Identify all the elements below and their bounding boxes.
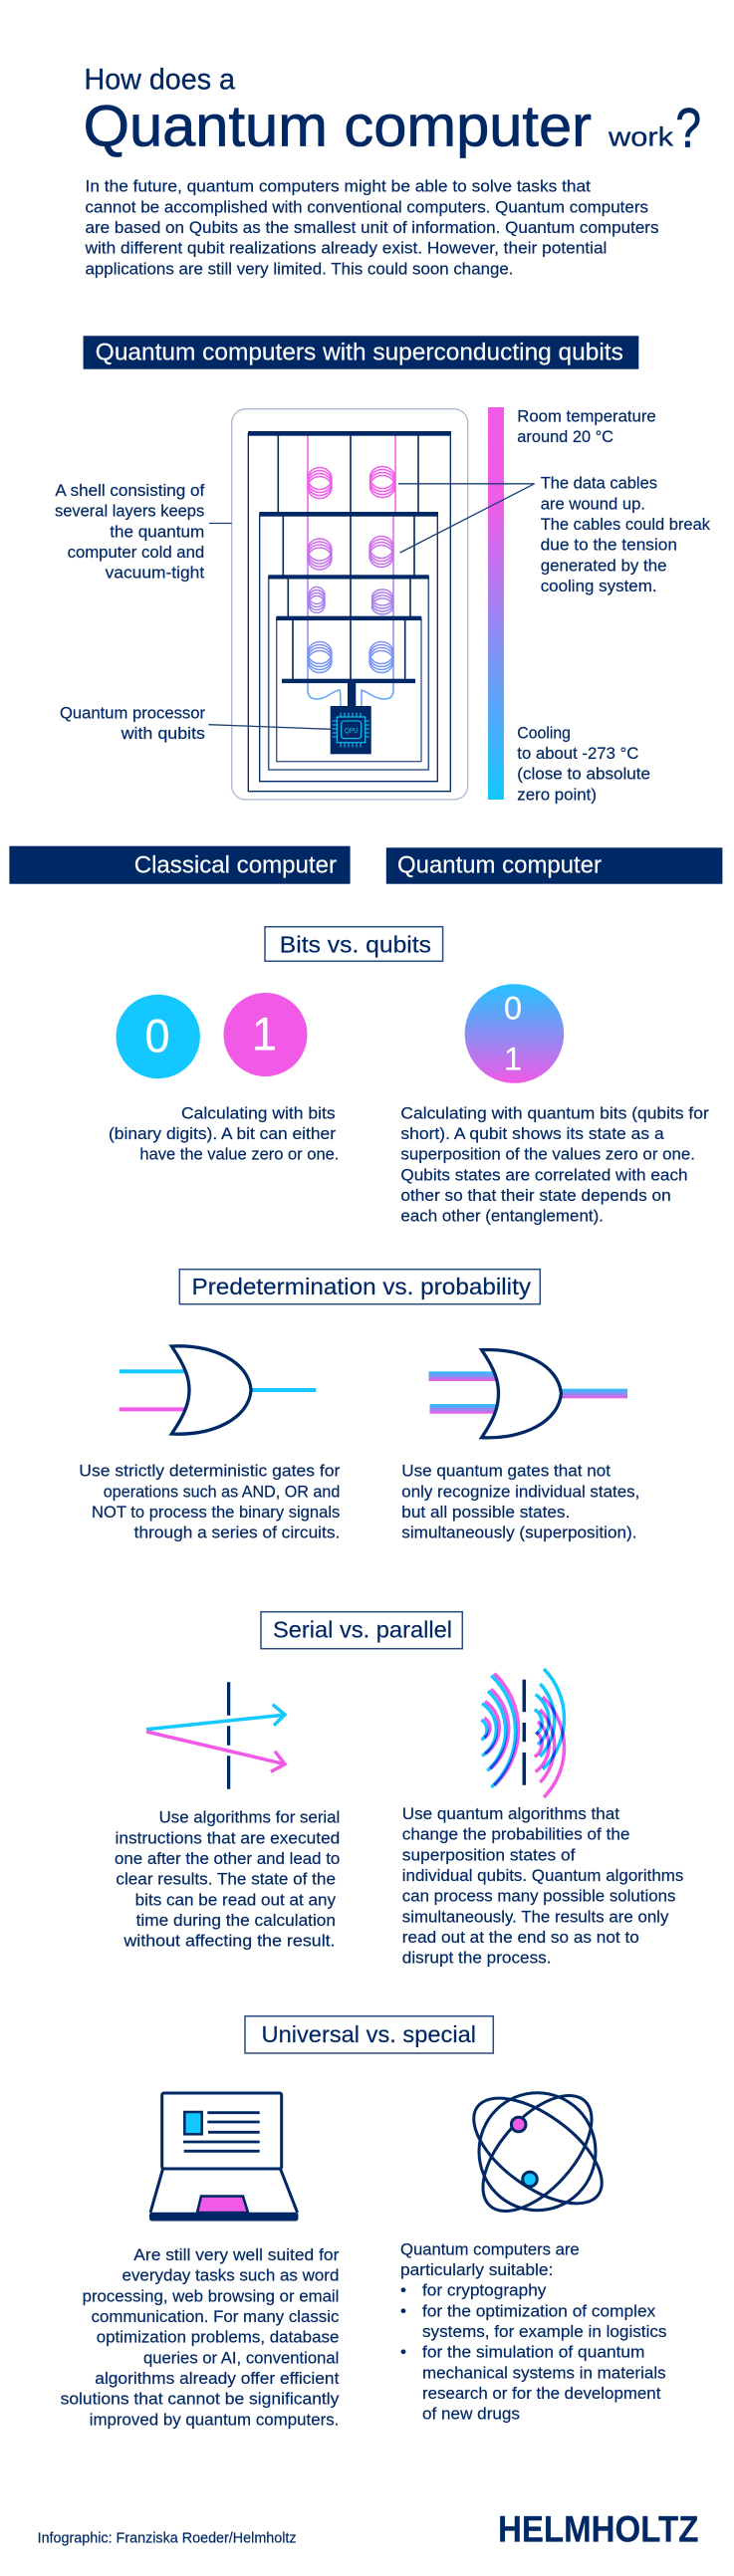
section heading: serial vs parallel: Serial vs. parallel: [273, 1616, 452, 1642]
icon: atom: [456, 2077, 619, 2229]
label: shell: computer cold and: [68, 543, 204, 562]
section heading: serial vs parallel: [261, 1612, 462, 1649]
label: shell: several layers keeps: [55, 502, 204, 521]
text: special: [400, 2239, 667, 2424]
text: special: particularly suitable:: [400, 2260, 553, 2279]
text: special: •: [400, 2301, 406, 2320]
section heading: universal vs special: [245, 2016, 493, 2053]
label: shell: vacuum-tight: [106, 564, 204, 583]
callout lines: [208, 484, 535, 729]
label: room temperature: Room temperature: [517, 406, 656, 425]
title: [84, 63, 701, 159]
text: qubits: other so that their state depends on: [400, 1186, 671, 1205]
QPU chip: [331, 706, 371, 754]
icon: qubit: 1: [504, 1042, 522, 1077]
text: quantum algorithms: change the probabilities of the: [402, 1825, 629, 1844]
text: universal: [61, 2245, 340, 2429]
label: data cables: are wound up.: [541, 494, 645, 513]
text: deterministic gates: operations such as AND, OR and: [104, 1482, 340, 1501]
text: quantum gates: [401, 1462, 639, 1542]
text: universal: Are still very well suited for: [133, 2245, 340, 2264]
icon: serial arrows through slits: [146, 1682, 285, 1789]
text: quantum algorithms: Use quantum algorithms that: [402, 1804, 619, 1823]
plates: [248, 431, 451, 707]
text: quantum gates: but all possible states.: [401, 1503, 570, 1522]
label: cooling: [517, 723, 650, 804]
icon: laptop: [149, 2093, 299, 2221]
text: serial algorithms: Use algorithms for serial: [159, 1808, 340, 1827]
title: How does a: [84, 63, 235, 96]
text: serial algorithms: time during the calculation: [136, 1911, 336, 1930]
section heading: predetermination vs probability: [179, 1270, 540, 1304]
data cables: [308, 435, 395, 706]
outer shell: [232, 409, 468, 800]
title: ?: [675, 97, 701, 159]
text: special: •: [400, 2343, 406, 2362]
label: room temperature: around 20 °C: [517, 427, 613, 446]
intro text: applications are still very limited. This could soon change.: [86, 259, 514, 278]
text: special: systems, for example in logistics: [422, 2322, 667, 2341]
text: serial algorithms: bits can be read out at any: [135, 1890, 336, 1909]
icon: bit zero: 0: [145, 1010, 169, 1061]
text: qubits: superposition of the values zero or one.: [400, 1145, 695, 1164]
text: serial algorithms: instructions that are executed: [116, 1828, 340, 1847]
column header: quantum computer: [386, 847, 722, 884]
text: universal: processing, web browsing or email: [83, 2286, 339, 2305]
icon: bit zero: [116, 995, 200, 1078]
text: universal: queries or AI, conventional: [143, 2348, 339, 2367]
section heading: predetermination vs probability: Predetermination vs. probability: [191, 1274, 531, 1299]
intro text: with different qubit realizations already exist. However, their potential: [84, 239, 607, 258]
section heading: universal vs special: Universal vs. special: [261, 2021, 476, 2047]
section heading: bits vs qubits: Bits vs. qubits: [280, 932, 431, 958]
cooling layers: [248, 433, 450, 792]
text: quantum algorithms: [402, 1804, 683, 1968]
text: deterministic gates: NOT to process the binary signals: [92, 1503, 340, 1522]
icon: quantum logic gate: [428, 1350, 627, 1438]
label: cooling: to about -273 °C: [517, 744, 638, 763]
label: room temperature: [517, 406, 656, 446]
text: quantum algorithms: superposition states of: [402, 1845, 576, 1864]
intro text: are based on Qubits as the smallest unit of information. Quantum computers: [86, 218, 659, 237]
text: universal: communication. For many classic: [92, 2307, 340, 2326]
text: bits: [109, 1103, 339, 1164]
text: serial algorithms: without affecting the result.: [122, 1932, 336, 1951]
text: deterministic gates: through a series of circuits.: [134, 1523, 340, 1542]
text: quantum algorithms: read out at the end so as not to: [402, 1928, 639, 1947]
label: shell: the quantum: [110, 522, 204, 541]
text: deterministic gates: Use strictly deterministic gates for: [79, 1462, 341, 1481]
label: data cables: The cables could break: [541, 515, 710, 534]
intro text: cannot be accomplished with conventional computers. Quantum computers: [86, 197, 648, 216]
text: qubits: Calculating with quantum bits (qubits for: [400, 1103, 709, 1122]
text: qubits: each other (entanglement).: [400, 1207, 604, 1226]
diagram: cryostat: [232, 409, 468, 800]
heading: superconducting qubits: Quantum computers with superconducting qubits: [96, 340, 623, 366]
text: quantum algorithms: disrupt the process.: [402, 1949, 552, 1968]
column header: classical computer: Classical computer: [134, 852, 337, 879]
text: serial algorithms: [115, 1808, 340, 1951]
icon: bit one: 1: [252, 1008, 277, 1059]
text: universal: optimization problems, database: [97, 2328, 339, 2347]
label: cooling: Cooling: [517, 723, 571, 742]
QPU chip: QPU: [345, 726, 359, 735]
text: quantum gates: Use quantum gates that not: [401, 1462, 611, 1481]
intro text: [84, 177, 658, 278]
icon: qubit: 0: [504, 991, 522, 1027]
section heading: bits vs qubits: [265, 927, 443, 961]
icon: classical logic gate: [120, 1346, 316, 1434]
label: cooling: (close to absolute: [517, 765, 650, 784]
text: special: research or for the development: [422, 2384, 661, 2403]
text: universal: solutions that cannot be significantly: [61, 2390, 340, 2409]
text: serial algorithms: clear results. The state of the: [116, 1870, 336, 1889]
text: special: mechanical systems in materials: [422, 2363, 666, 2382]
label: shell: [55, 481, 204, 583]
text: deterministic gates: [79, 1462, 341, 1542]
title: work: [608, 122, 674, 152]
text: bits: Calculating with bits: [181, 1103, 336, 1122]
label: quantum processor: [60, 703, 205, 743]
text: quantum gates: simultaneously (superposition).: [401, 1523, 637, 1542]
label: data cables: [541, 474, 710, 595]
label: data cables: cooling system.: [541, 577, 657, 595]
logo: Helmholtz: HELMHOLTZ: [498, 2508, 698, 2550]
text: universal: everyday tasks such as word: [122, 2266, 339, 2285]
intro text: In the future, quantum computers might be able to solve tasks that: [86, 177, 591, 196]
text: special: for cryptography: [422, 2281, 547, 2300]
label: shell: A shell consisting of: [55, 481, 204, 500]
icon: qubit: [465, 984, 564, 1083]
title: Quantum computer: [84, 95, 592, 159]
icon: quantum wave interference: [481, 1669, 564, 1797]
text: special: •: [400, 2281, 406, 2300]
text: bits: have the value zero or one.: [139, 1145, 339, 1164]
label: quantum processor: with qubits: [121, 724, 205, 743]
icon: bit one: [223, 993, 307, 1076]
column header: quantum computer: Quantum computer: [397, 852, 602, 879]
label: quantum processor: Quantum processor: [60, 703, 205, 722]
text: special: of new drugs: [422, 2405, 520, 2424]
text: universal: improved by quantum computers.: [90, 2410, 339, 2429]
text: serial algorithms: one after the other and lead to: [115, 1849, 340, 1868]
text: quantum algorithms: individual qubits. Quantum algorithms: [402, 1866, 683, 1885]
label: cooling: zero point): [517, 785, 597, 804]
label: data cables: due to the tension: [541, 536, 677, 555]
text: qubits: [400, 1103, 709, 1226]
column header: classical computer: [9, 846, 351, 884]
credit: Infographic: Franziska Roeder/Helmholtz: [38, 2529, 297, 2546]
text: qubits: Qubits states are correlated with each: [400, 1165, 688, 1184]
text: quantum gates: only recognize individual states,: [401, 1482, 639, 1501]
text: special: Quantum computers are: [400, 2239, 580, 2258]
label: data cables: generated by the: [541, 556, 667, 575]
text: qubits: short). A qubit shows its state as a: [400, 1124, 664, 1143]
label: data cables: The data cables: [541, 474, 657, 493]
text: quantum algorithms: simultaneously. The results are only: [402, 1907, 669, 1926]
text: universal: algorithms already offer efficient: [95, 2369, 340, 2388]
text: bits: (binary digits). A bit can either: [109, 1124, 336, 1143]
text: special: for the optimization of complex: [422, 2301, 656, 2320]
text: special: for the simulation of quantum: [422, 2343, 645, 2362]
text: quantum algorithms: can process many possible solutions: [402, 1887, 675, 1906]
temperature gradient bar: [488, 407, 504, 800]
